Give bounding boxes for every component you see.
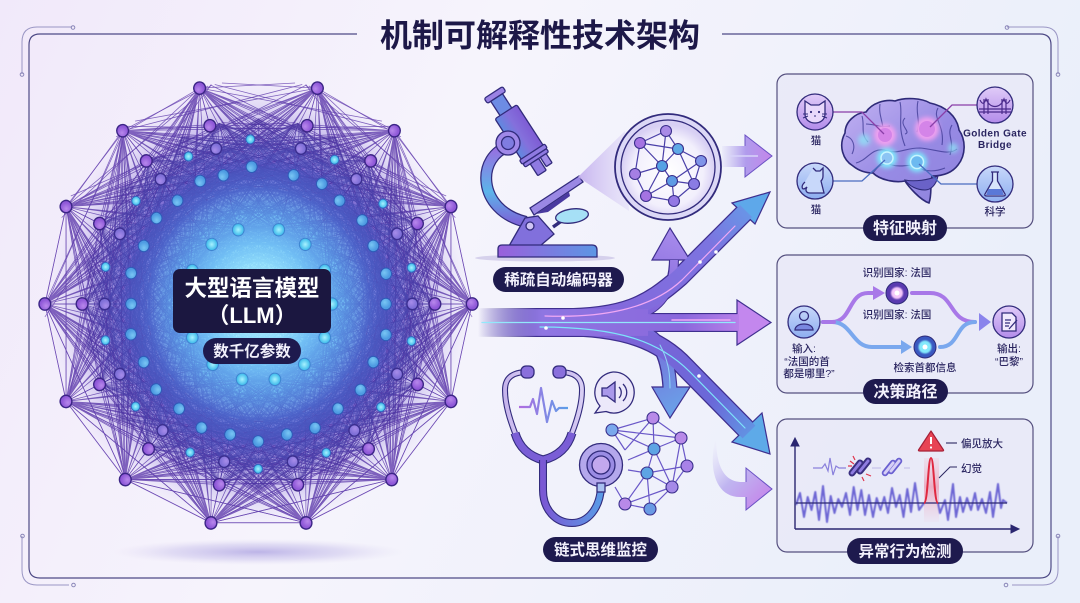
- arrows: branching flow from the model: [474, 192, 771, 454]
- output text: 输出:: [997, 342, 1021, 355]
- panel: feature mapping: [777, 74, 1033, 241]
- icon: broken chain link: [848, 456, 871, 481]
- anomaly detection label: 异常行为检测: [858, 542, 952, 560]
- panel: decision path: [777, 255, 1033, 404]
- input text: [783, 342, 835, 380]
- signal chart: [791, 438, 1019, 533]
- arrow: microscope to feature mapping: [722, 135, 772, 177]
- anomaly detection label: [847, 538, 963, 564]
- arrow heads: [652, 192, 771, 454]
- node: blue feature: [914, 336, 936, 358]
- decision path label: [863, 379, 948, 404]
- chain of thought label: 链式思维监控: [554, 540, 647, 559]
- panel: anomaly detection: [777, 419, 1033, 564]
- decision path label: 决策路径: [873, 382, 938, 401]
- label: cat: 猫: [811, 203, 821, 216]
- icon: bridge: [977, 87, 1013, 123]
- label: bias amplification: 偏见放大: [961, 437, 1003, 450]
- label: bias amplification: [946, 437, 1003, 450]
- flow arrowheads: [873, 286, 991, 354]
- panel: chain of thought monitoring: [505, 366, 693, 562]
- input text: 都是哪里?”: [783, 368, 835, 380]
- icon: cat face: [797, 94, 833, 130]
- input text: 输入:: [792, 342, 816, 355]
- icon: sitting cat: [797, 163, 833, 199]
- label: hallucination: 幻觉: [961, 462, 982, 475]
- icon: heartbeat line: [519, 388, 568, 422]
- LLM label box: （LLM）: [207, 303, 297, 328]
- output text: “巴黎”: [995, 355, 1023, 368]
- label: retrieve capital info: 检索首都信息: [894, 361, 956, 374]
- sparse autoencoder label: 稀疏自动编码器: [504, 270, 613, 289]
- sparse autoencoder label: [493, 267, 624, 292]
- panel: sparse autoencoder: [475, 84, 721, 292]
- output text: [995, 342, 1023, 368]
- icon: warning triangle: [918, 431, 944, 451]
- magnified view with network: [578, 114, 721, 220]
- label: hallucination: [939, 462, 982, 478]
- feature mapping label: 特征映射: [873, 218, 937, 238]
- label: Golden Gate Bridge: Bridge: [978, 140, 1012, 151]
- output node: [993, 306, 1025, 338]
- label: cat: 猫: [811, 134, 821, 147]
- parameter count pill: 数千亿参数: [213, 342, 291, 360]
- chain of thought label: [543, 537, 658, 562]
- LLM label box: 大型语言模型: [184, 276, 320, 301]
- icon: brain: [842, 99, 964, 203]
- flow highlights: [482, 226, 745, 428]
- LLM label box: [173, 269, 331, 333]
- feature mapping label: [863, 215, 947, 241]
- arrow: small curved arrow to anomaly detection: [713, 437, 772, 510]
- label: Golden Gate Bridge: Golden Gate: [963, 128, 1027, 140]
- icon: microscope: [475, 84, 615, 262]
- panel: large language model network: [0, 0, 555, 603]
- monitored network: [606, 412, 693, 515]
- icon: stethoscope: [505, 366, 622, 523]
- parameter count pill: [203, 338, 301, 364]
- arrow fills: [474, 211, 749, 432]
- label: identify country top: 识别国家: 法国: [863, 266, 931, 279]
- node: purple feature: [886, 282, 908, 304]
- title: 机制可解释性技术架构: [380, 18, 700, 54]
- neural network graph: [0, 0, 555, 603]
- icon: small wave: [813, 458, 846, 475]
- label: identify country bottom: 识别国家: 法国: [863, 308, 931, 321]
- label: science: 科学: [984, 205, 1006, 218]
- label: Golden Gate Bridge: [963, 128, 1027, 151]
- red spike: [924, 458, 938, 503]
- network ground shadow: [113, 539, 403, 565]
- icon: speech bubble with speaker: [595, 372, 634, 413]
- icon: flask: [977, 166, 1013, 202]
- arrow outlines: [474, 212, 748, 431]
- decision flow lines: [823, 293, 975, 347]
- input text: “法国的首: [784, 355, 830, 368]
- spike highlight band: [924, 458, 939, 522]
- icon: chain link: [872, 461, 910, 473]
- feature connector lines: [833, 105, 977, 184]
- input node: [788, 306, 820, 338]
